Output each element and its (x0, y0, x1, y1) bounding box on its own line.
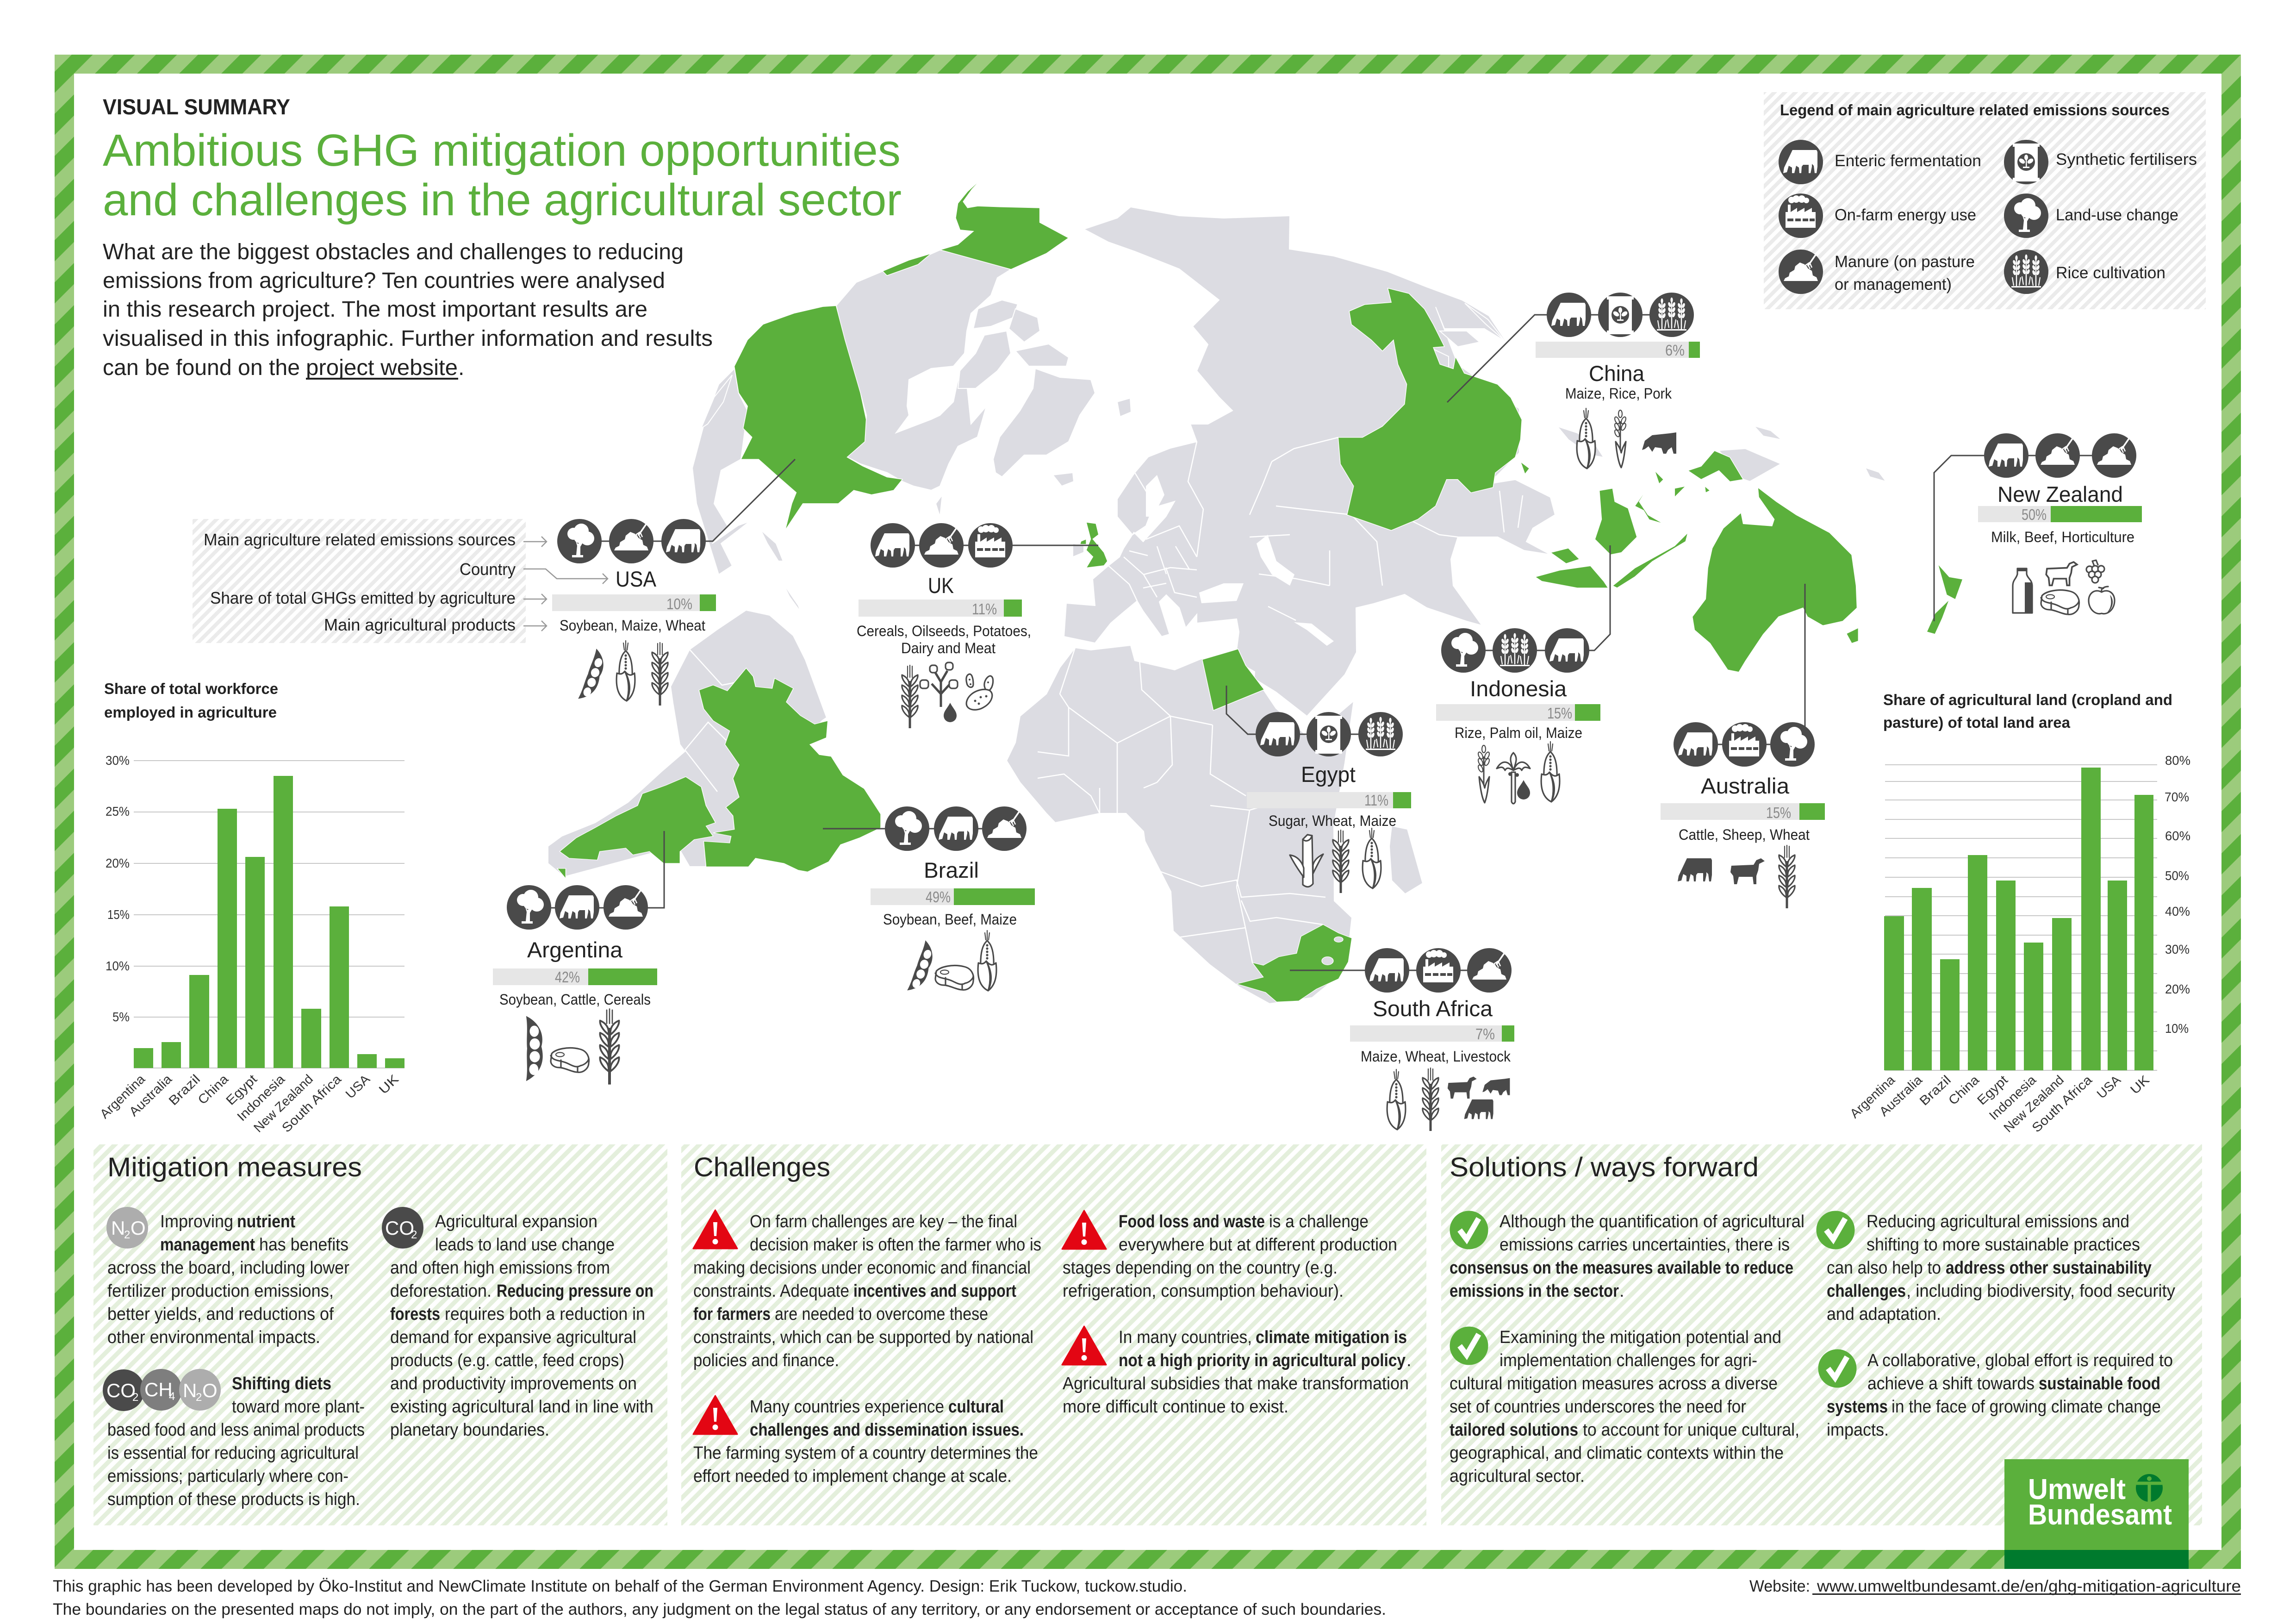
text: agricultural expansion: Agricultural expansion (435, 1212, 597, 1231)
bars (1884, 768, 2153, 1070)
icon: check (1450, 1211, 1488, 1249)
axis labels: 10% (2165, 1021, 2189, 1036)
intro text: project website (306, 356, 458, 380)
country card: Brazil: Brazil (924, 858, 979, 882)
text: nutrient management: across the board, including lower (107, 1258, 349, 1278)
text: agricultural expansion: products (e.g. cattle, feed crops) (390, 1351, 624, 1370)
text: nutrient management (107, 1212, 349, 1347)
country card: Australia (1661, 584, 1825, 908)
text: nutrient management: better yields, and reductions of (107, 1305, 334, 1324)
text: climate mitigation priority: Agricultural subsidies that make transformation (1063, 1374, 1409, 1393)
icon: CO2 CH4 N2O: CH (144, 1379, 173, 1400)
country card: Argentina: 42% (555, 968, 580, 986)
chart: share of workforce (97, 680, 404, 1135)
title (103, 94, 902, 225)
footer website: www.umweltbundesamt.de/en/ghg-mitigation-agriculture (1817, 1577, 2241, 1595)
map: Korea (1433, 349, 1449, 369)
country labels: USA (2094, 1072, 2123, 1101)
text: shifting diets: sumption of these products is high. (107, 1490, 360, 1509)
map: Iceland (1053, 473, 1074, 486)
panel: challenges (681, 1144, 1426, 1525)
country card: South Africa: South Africa (1373, 996, 1493, 1021)
map: Svalbard (1117, 398, 1131, 417)
intro text (103, 240, 713, 380)
axis labels: 20% (2165, 982, 2190, 996)
country shape: Egypt (1202, 649, 1264, 711)
legend: on-farm energy use: On-farm energy use (1835, 206, 1976, 224)
text: on farm challenges: constraints, which can be supported by national (693, 1328, 1033, 1347)
country labels: New Zealand (2001, 1073, 2066, 1135)
text: agricultural expansion: Reducing pressure on (497, 1281, 653, 1301)
country card: Egypt: Egypt (1301, 762, 1356, 787)
text: nutrient management: Improving (160, 1212, 233, 1231)
icon: check (1818, 1349, 1857, 1388)
text: nutrient management: management (160, 1235, 255, 1255)
text: tailored solutions: Examining the mitigation potential and (1500, 1328, 1781, 1347)
icon: warning (693, 1210, 737, 1249)
country card: Argentina: Soybean, Cattle, Cereals (499, 991, 651, 1008)
map: Africa (1007, 645, 1354, 1004)
country labels: Egypt (1974, 1073, 2010, 1108)
icon: check (1450, 1327, 1488, 1365)
map: highlighted countries (557, 178, 1963, 1002)
text: agricultural expansion (390, 1212, 653, 1440)
legend: synthetic fertilisers: Synthetic fertilisers (2056, 150, 2197, 169)
icon: CO2: 2 (411, 1229, 417, 1241)
intro text: . (458, 356, 464, 380)
text: nutrient management: fertilizer production emissions, (107, 1281, 334, 1301)
text: food loss and waste (1063, 1212, 1397, 1301)
axis labels (2165, 753, 2190, 1036)
chart title (104, 680, 278, 721)
axis labels: 70% (2165, 790, 2189, 804)
country card: Argentina: Argentina (527, 937, 623, 962)
text: sustainability challenges: Reducing agricultural emissions and (1867, 1212, 2129, 1231)
text: tailored solutions: agricultural sector. (1450, 1467, 1585, 1486)
text: climate mitigation priority: In many countries, (1119, 1328, 1252, 1347)
icon: N2O: O (131, 1217, 146, 1239)
icon: warning (1062, 1211, 1106, 1249)
text: sustainability challenges: can also help to (1827, 1258, 1941, 1278)
country card: New Zealand: New Zealand (1997, 482, 2123, 506)
map: Mexico and Central America (692, 369, 750, 575)
text: agricultural expansion: existing agricultural land in line with (390, 1397, 653, 1417)
country card: Indonesia: Rize, Palm oil, Maize (1455, 725, 1582, 741)
legend: synthetic fertilisers (2004, 140, 2197, 184)
heading: Mitigation measures (107, 1152, 362, 1182)
text: nutrient management: nutrient (237, 1212, 295, 1231)
map: Madagascar (1389, 826, 1423, 894)
icon: N2O: 2 (124, 1229, 130, 1241)
text: cultural challenges: cultural (948, 1397, 1004, 1417)
country labels: Brazil (1916, 1073, 1954, 1108)
icon: N2O: N (111, 1217, 125, 1239)
country shape: UK (1080, 522, 1108, 568)
text: food loss and waste: is a challenge (1269, 1212, 1369, 1231)
country card: China: China (1589, 361, 1645, 386)
text: on farm challenges: are needed to overcome these (775, 1305, 988, 1324)
text: sustainable food systems: in the face of growing climate change (1892, 1397, 2161, 1417)
text: agricultural expansion: and productivity improvements on (390, 1374, 637, 1393)
text: nutrient management: has benefits (259, 1235, 348, 1255)
axis labels: 60% (2165, 829, 2190, 843)
legend: manure: Manure (on pasture (1835, 253, 1975, 271)
bars (134, 776, 404, 1068)
text: sustainability challenges: and adaptation. (1827, 1305, 1941, 1324)
heading: Challenges (694, 1152, 830, 1182)
country card: China: 6% (1665, 342, 1685, 359)
map: Kamchatka and Sakhalin (1440, 303, 1504, 347)
map: inland seas (1146, 384, 1334, 646)
text: agricultural expansion: deforestation. (390, 1281, 492, 1301)
map: Pacific islets (1754, 426, 1886, 481)
icon: CO2 CH4 N2O: CO (106, 1380, 136, 1401)
text: on farm challenges: On farm challenges are key – the final (750, 1212, 1017, 1231)
country card: Argentina (493, 831, 664, 1085)
country card: USA: 10% (666, 595, 692, 612)
map: Baja California (701, 375, 732, 428)
text: consensus: . (1619, 1281, 1624, 1301)
country card: New Zealand: Milk, Beef, Horticulture (1991, 529, 2134, 545)
country card: China (1447, 293, 1700, 468)
country card: Brazil: 49% (926, 888, 951, 906)
icon: N2O (106, 1207, 148, 1249)
legend: manure: or management) (1835, 275, 1952, 294)
map: Caribbean (761, 495, 942, 612)
country labels: Egypt (223, 1072, 260, 1108)
text: sustainability challenges: shifting to more sustainable practices (1867, 1235, 2140, 1255)
text: tailored solutions: set of countries underscores the need for (1450, 1397, 1746, 1417)
country labels: USA (342, 1072, 373, 1101)
legend (1764, 92, 2206, 309)
how to read key: Country (460, 560, 516, 579)
heading: Solutions / ways forward (1450, 1152, 1759, 1182)
text: sustainable food systems: achieve a shift towards (1867, 1374, 2035, 1393)
text: on farm challenges: making decisions under economic and financial (693, 1258, 1031, 1278)
map: South America (548, 610, 827, 877)
country shape: Argentina (557, 777, 716, 879)
map: Greenland (993, 369, 1095, 477)
axis labels: 30% (2165, 942, 2190, 956)
footer credits (53, 1577, 1386, 1618)
country card: UK: 11% (972, 600, 997, 618)
chart title: Share of agricultural land (cropland and (1883, 691, 2172, 708)
country card: Egypt: 11% (1364, 792, 1388, 809)
text: climate mitigation priority: more difficult continue to exist. (1063, 1397, 1288, 1417)
country labels: UK (376, 1072, 401, 1097)
country card: South Africa: 7% (1475, 1025, 1495, 1043)
text: on farm challenges: for farmers (693, 1305, 771, 1324)
country labels: China (1946, 1072, 1982, 1108)
headline: and challenges in the agricultural sector (103, 175, 902, 225)
logo: Umweltbundesamt: Bundesamt (2028, 1499, 2172, 1531)
text: cultural challenges: Many countries experience (750, 1397, 944, 1417)
text: consensus: emissions in the sector (1450, 1281, 1619, 1301)
text: agricultural expansion: leads to land use change (435, 1235, 615, 1255)
text: shifting diets: emissions; particularly where con- (107, 1467, 348, 1486)
axis labels: 80% (2165, 753, 2190, 768)
axis labels: 25% (106, 804, 130, 818)
country shape: China (1338, 288, 1530, 531)
text: food loss and waste: Food loss and waste (1119, 1212, 1265, 1231)
chart title: pasture) of total land area (1883, 714, 2071, 731)
text: sustainable food systems: sustainable food (2039, 1374, 2160, 1393)
how to read key: Main agricultural products (324, 615, 516, 634)
intro text: can be found on the (103, 356, 300, 380)
country labels: UK (2128, 1072, 2152, 1097)
legend title: Legend of main agriculture related emissions sources (1780, 101, 2170, 119)
map: Arctic islands (958, 300, 1069, 388)
country labels: Australia (126, 1072, 174, 1119)
footer website: Website: (1749, 1577, 1810, 1595)
text: sustainable food systems: systems (1827, 1397, 1888, 1417)
map: Eurasia (1064, 207, 1555, 716)
text: agricultural expansion: forests (390, 1305, 440, 1324)
country labels (97, 1072, 401, 1135)
country labels: New Zealand (251, 1072, 316, 1135)
country shape: South Africa (1237, 924, 1352, 1002)
text: climate mitigation priority: . (1406, 1351, 1412, 1370)
text: climate mitigation priority: climate mitigation is (1256, 1328, 1407, 1347)
text: shifting diets: based food and less animal products (107, 1420, 365, 1440)
text: food loss and waste: stages depending on the country (e.g. (1063, 1258, 1338, 1278)
country card: Indonesia: Indonesia (1470, 676, 1567, 701)
map: Papua New Guinea (1719, 449, 1781, 481)
axis labels: 5% (112, 1010, 130, 1024)
text: climate mitigation priority (1063, 1328, 1412, 1417)
text: on farm challenges: constraints. Adequate (693, 1281, 849, 1301)
text: consensus: Although the quantification of agricultural (1500, 1212, 1804, 1231)
footer credits: This graphic has been developed by Öko-Institut and NewClimate Institute on behalf of the German Environment Agency. Design: Erik Tuckow, tuckow.studio. (53, 1577, 1187, 1595)
text: tailored solutions: tailored solutions (1450, 1420, 1578, 1440)
logo: Umweltbundesamt: Umwelt (2028, 1474, 2126, 1505)
country card: USA (552, 459, 795, 706)
country shape: New Zealand (1927, 564, 1963, 634)
panel: solutions (1441, 1144, 2202, 1525)
legend: rice cultivation (2004, 250, 2165, 294)
intro text: emissions from agriculture? Ten countries were analysed (103, 269, 665, 293)
country labels: Argentina (1847, 1072, 1898, 1121)
country card: Australia: Cattle, Sheep, Wheat (1679, 826, 1810, 843)
legend: enteric fermentation: Enteric fermentation (1835, 152, 1981, 170)
chart title: employed in agriculture (104, 704, 277, 721)
axis labels: 15% (107, 907, 130, 922)
text: agricultural expansion: planetary boundaries. (390, 1420, 549, 1440)
icon: check (1816, 1211, 1855, 1249)
icon: warning (1062, 1326, 1106, 1365)
intro text: visualised in this infographic. Further information and results (103, 326, 713, 351)
text: sustainability challenges (1827, 1212, 2175, 1324)
country shape: Indonesia (1535, 451, 1743, 588)
country labels (1847, 1072, 2152, 1135)
text: cultural challenges: challenges and dissemination issues. (750, 1420, 1024, 1440)
text: agricultural expansion: requires both a reduction in (445, 1305, 645, 1324)
text: shifting diets: is essential for reducing agricultural (107, 1443, 359, 1463)
country shape: USA (734, 178, 1069, 530)
text: sustainability challenges: challenges (1827, 1281, 1906, 1301)
text: tailored solutions: cultural mitigation measures across a diverse (1450, 1374, 1778, 1393)
country shape: Australia (1692, 487, 1858, 672)
map: small gray enclaves (1322, 937, 1343, 965)
legend: enteric fermentation (1779, 140, 1981, 184)
text: shifting diets (107, 1374, 365, 1509)
country card: New Zealand (1934, 433, 2142, 621)
icon: warning (693, 1396, 737, 1434)
country card: South Africa (1290, 948, 1514, 1131)
chart title (1883, 691, 2172, 731)
logo: Umweltbundesamt (2004, 1459, 2189, 1569)
text: sustainability challenges: , including biodiversity, food security (1906, 1281, 2175, 1301)
legend: land-use change (2004, 194, 2178, 238)
intro text: in this research project. The most important results are (103, 297, 647, 322)
country labels: Australia (1877, 1072, 1925, 1119)
headline (103, 125, 902, 225)
country labels: Argentina (97, 1072, 148, 1121)
text: consensus (1450, 1212, 1804, 1301)
axis labels (106, 753, 130, 1024)
icon: CO2 CH4 N2O: 2 (132, 1391, 138, 1404)
legend: land-use change: Land-use change (2056, 206, 2178, 224)
text: cultural challenges (693, 1397, 1038, 1486)
map: Canada (836, 250, 1011, 490)
country labels: Indonesia (1986, 1072, 2039, 1123)
legend: on-farm energy use (1779, 194, 1976, 238)
country card: Brazil (823, 806, 1035, 995)
text: sustainable food systems (1827, 1351, 2173, 1440)
text: tailored solutions: implementation challenges for agri- (1500, 1351, 1757, 1370)
axis labels: 20% (106, 856, 130, 870)
country labels: South Africa (279, 1072, 344, 1135)
axis labels: 50% (2165, 868, 2189, 883)
text: sustainability challenges: address other sustainability (1946, 1258, 2152, 1278)
map: borders (685, 437, 1523, 962)
icon: CO2 CH4 N2O (103, 1369, 221, 1411)
headline: Ambitious GHG mitigation opportunities (103, 125, 901, 175)
country card: USA: USA (616, 567, 657, 591)
text: nutrient management: other environmental impacts. (107, 1328, 320, 1347)
icon: CO2 CH4 N2O: 4 (169, 1390, 175, 1403)
text: cultural challenges: The farming system of a country determines the (693, 1443, 1038, 1463)
icon: CO2: CO (385, 1217, 414, 1239)
country card: Egypt: Sugar, Wheat, Maize (1269, 812, 1396, 829)
country card: Brazil: Soybean, Beef, Maize (883, 911, 1017, 928)
text: on farm challenges: incentives and support (853, 1281, 1016, 1301)
map: Japan (1557, 426, 1604, 457)
text: sustainable food systems: impacts. (1827, 1420, 1889, 1440)
country card: UK (857, 523, 1098, 728)
country card: Australia: 15% (1766, 804, 1791, 821)
axis labels: 30% (106, 753, 130, 768)
text: cultural challenges: effort needed to implement change at scale. (693, 1467, 1012, 1486)
chart title: Share of total workforce (104, 680, 278, 697)
country card: New Zealand: 50% (2022, 506, 2047, 523)
footer credits: The boundaries on the presented maps do not imply, on the part of the authors, any judgment on the legal status of any territory, or any endorsement or acceptance of such boundaries. (53, 1600, 1386, 1618)
country labels: Indonesia (234, 1072, 287, 1124)
country card: China: Maize, Rice, Pork (1565, 385, 1672, 402)
kicker: VISUAL SUMMARY (103, 94, 290, 119)
axis labels: 10% (106, 959, 130, 973)
country labels: China (195, 1072, 231, 1107)
country card: UK: UK (928, 573, 954, 598)
text: agricultural expansion: demand for expansive agricultural (390, 1328, 636, 1347)
country card: Indonesia (1436, 545, 1610, 804)
text: shifting diets: toward more plant- (232, 1397, 365, 1417)
text: food loss and waste: everywhere but at different production (1119, 1235, 1397, 1255)
icon: CO2 CH4 N2O: O (202, 1380, 218, 1401)
country card: USA: Soybean, Maize, Wheat (560, 617, 705, 634)
text: on farm challenges: decision maker is often the farmer who is (750, 1235, 1041, 1255)
text: climate mitigation priority: not a high priority in agricultural policy (1119, 1351, 1406, 1370)
country labels: Brazil (166, 1072, 203, 1108)
axis labels: 40% (2165, 904, 2190, 918)
country card: Australia: Australia (1701, 774, 1790, 798)
world map (548, 207, 1886, 1004)
text: sustainable food systems: A collaborative, global effort is required to (1867, 1351, 2173, 1370)
country card: South Africa: Maize, Wheat, Livestock (1361, 1048, 1511, 1065)
icon: CO2 CH4 N2O: 2 (196, 1391, 202, 1404)
country card: UK: Dairy and Meat (901, 640, 996, 656)
how to read key: Share of total GHGs emitted by agriculture (210, 588, 516, 607)
text: tailored solutions (1450, 1328, 1799, 1486)
text: on farm challenges (693, 1212, 1041, 1370)
text: tailored solutions: to account for unique cultural, (1583, 1420, 1799, 1440)
text: agricultural expansion: and often high emissions from (390, 1258, 610, 1278)
text: tailored solutions: geographical, and climatic contexts within the (1450, 1443, 1784, 1463)
country shape: Brazil (699, 668, 881, 872)
text: on farm challenges: policies and finance. (693, 1351, 839, 1370)
text: food loss and waste: refrigeration, consumption behaviour). (1063, 1281, 1344, 1301)
how to read key (193, 519, 608, 643)
icon: CO2 CH4 N2O: N (183, 1380, 197, 1401)
country card: UK: Cereals, Oilseeds, Potatoes, (857, 623, 1031, 639)
country labels: South Africa (2029, 1072, 2095, 1135)
intro text: What are the biggest obstacles and challenges to reducing (103, 240, 684, 264)
text: consensus: emissions carries uncertainties, there is (1500, 1235, 1790, 1255)
legend: rice cultivation: Rice cultivation (2056, 264, 2165, 282)
how to read key: Main agriculture related emissions sources (204, 530, 516, 549)
panel: mitigation measures (93, 1144, 667, 1525)
chart: share of agricultural land (1847, 691, 2190, 1135)
country card: Egypt (1226, 686, 1411, 893)
legend: manure (1779, 250, 1975, 294)
map: Ireland (1073, 543, 1084, 557)
text: consensus: consensus on the measures available to reduce (1450, 1258, 1793, 1278)
text: shifting diets: Shifting diets (232, 1374, 331, 1393)
country card: Indonesia: 15% (1547, 705, 1572, 722)
icon: CO2 (382, 1207, 423, 1249)
